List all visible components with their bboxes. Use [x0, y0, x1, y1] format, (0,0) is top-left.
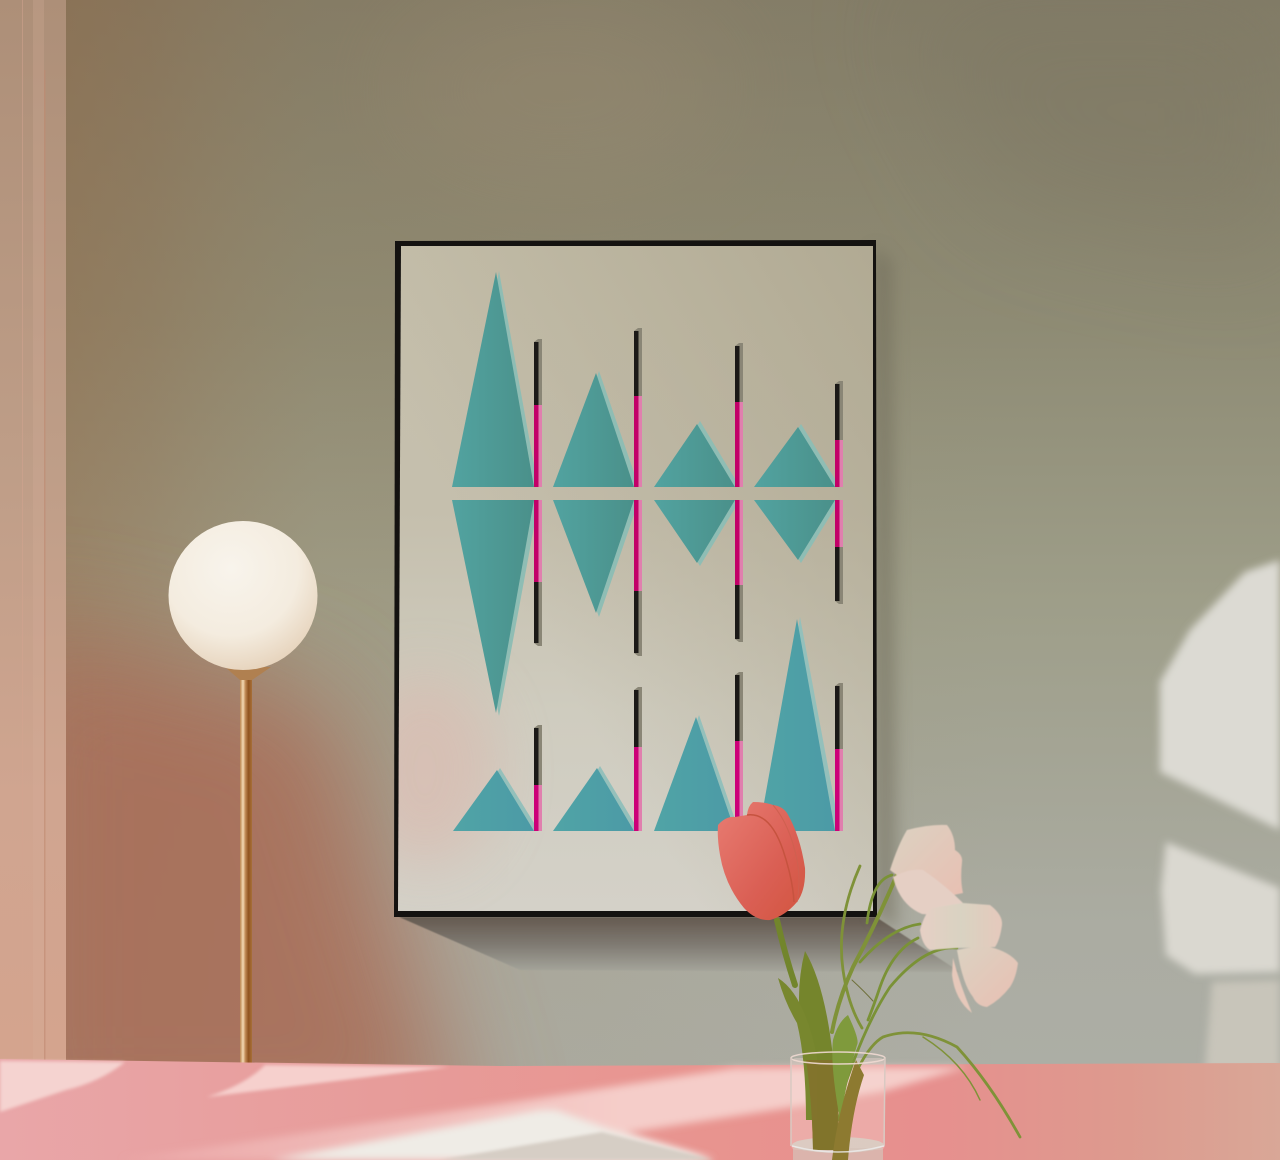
bright paper sheet: [270, 1110, 714, 1160]
bar 3 bottom: [735, 672, 743, 831]
poster frame: [355, 240, 877, 917]
tulip stems and grasses: [777, 866, 1020, 1137]
petal second: [893, 870, 963, 915]
triangles mirrored: [452, 500, 835, 713]
bar 2 mirrored: [634, 500, 642, 656]
petal sliver: [952, 958, 972, 1013]
bars: bottom row: [534, 672, 843, 831]
pink table top: [0, 1059, 1280, 1160]
bar 4 mirrored: [835, 500, 843, 604]
vase: glass: [791, 1058, 885, 1160]
pale flowers: [890, 825, 1018, 1013]
grass blades: [832, 866, 1020, 1137]
bar 4 bottom: [835, 683, 843, 831]
triangles bottom: [453, 619, 835, 831]
window light on wall: [1160, 560, 1280, 1070]
triangle shadows bottom: [460, 617, 840, 831]
beige sheet shade: [439, 1132, 714, 1160]
bar 4 top: [835, 381, 843, 487]
vase rim and front glass: [791, 1052, 885, 1152]
bar 1 top: [534, 339, 542, 487]
leaf lower brown section: [806, 1060, 838, 1150]
bar 1 bottom: [534, 725, 542, 831]
lamp globe: [168, 521, 318, 670]
tulip leaves: [778, 951, 864, 1160]
poster paper: [355, 246, 873, 911]
leaf right: [832, 1015, 858, 1120]
red tulip head: [718, 802, 805, 920]
chart group: bottom row triangles: [453, 617, 840, 831]
bar 2 bottom: [634, 687, 642, 831]
triangle shadows mirrored: [456, 500, 840, 716]
tulip stem: [777, 920, 795, 985]
thin stems: [833, 875, 957, 1125]
floor lamp: [168, 521, 318, 1063]
sun streak: [122, 1067, 967, 1160]
bars: mirrored row: [534, 500, 843, 656]
leaf front: [778, 978, 817, 1120]
petal lower: [957, 947, 1018, 1007]
lamp cup: [225, 667, 271, 680]
chart group: top row triangles: [452, 271, 840, 487]
bar 2 top: [634, 328, 642, 487]
poster shadow: [399, 246, 960, 972]
table light patches: [0, 1061, 449, 1112]
bar 3 mirrored: [735, 500, 743, 642]
petal third: [920, 903, 1002, 950]
triangle shadows top: [460, 271, 840, 487]
petal top: [890, 825, 963, 900]
bars: top row: [534, 328, 843, 487]
curtain strip: [0, 0, 66, 1062]
triangles top: [452, 272, 835, 487]
submerged stalks: [832, 1060, 864, 1160]
bar 1 mirrored: [534, 500, 542, 646]
chart group: mirrored triangles: [452, 500, 840, 716]
bar 3 top: [735, 343, 743, 487]
lamp pole: [240, 672, 252, 1063]
leaf behind: [799, 951, 838, 1150]
